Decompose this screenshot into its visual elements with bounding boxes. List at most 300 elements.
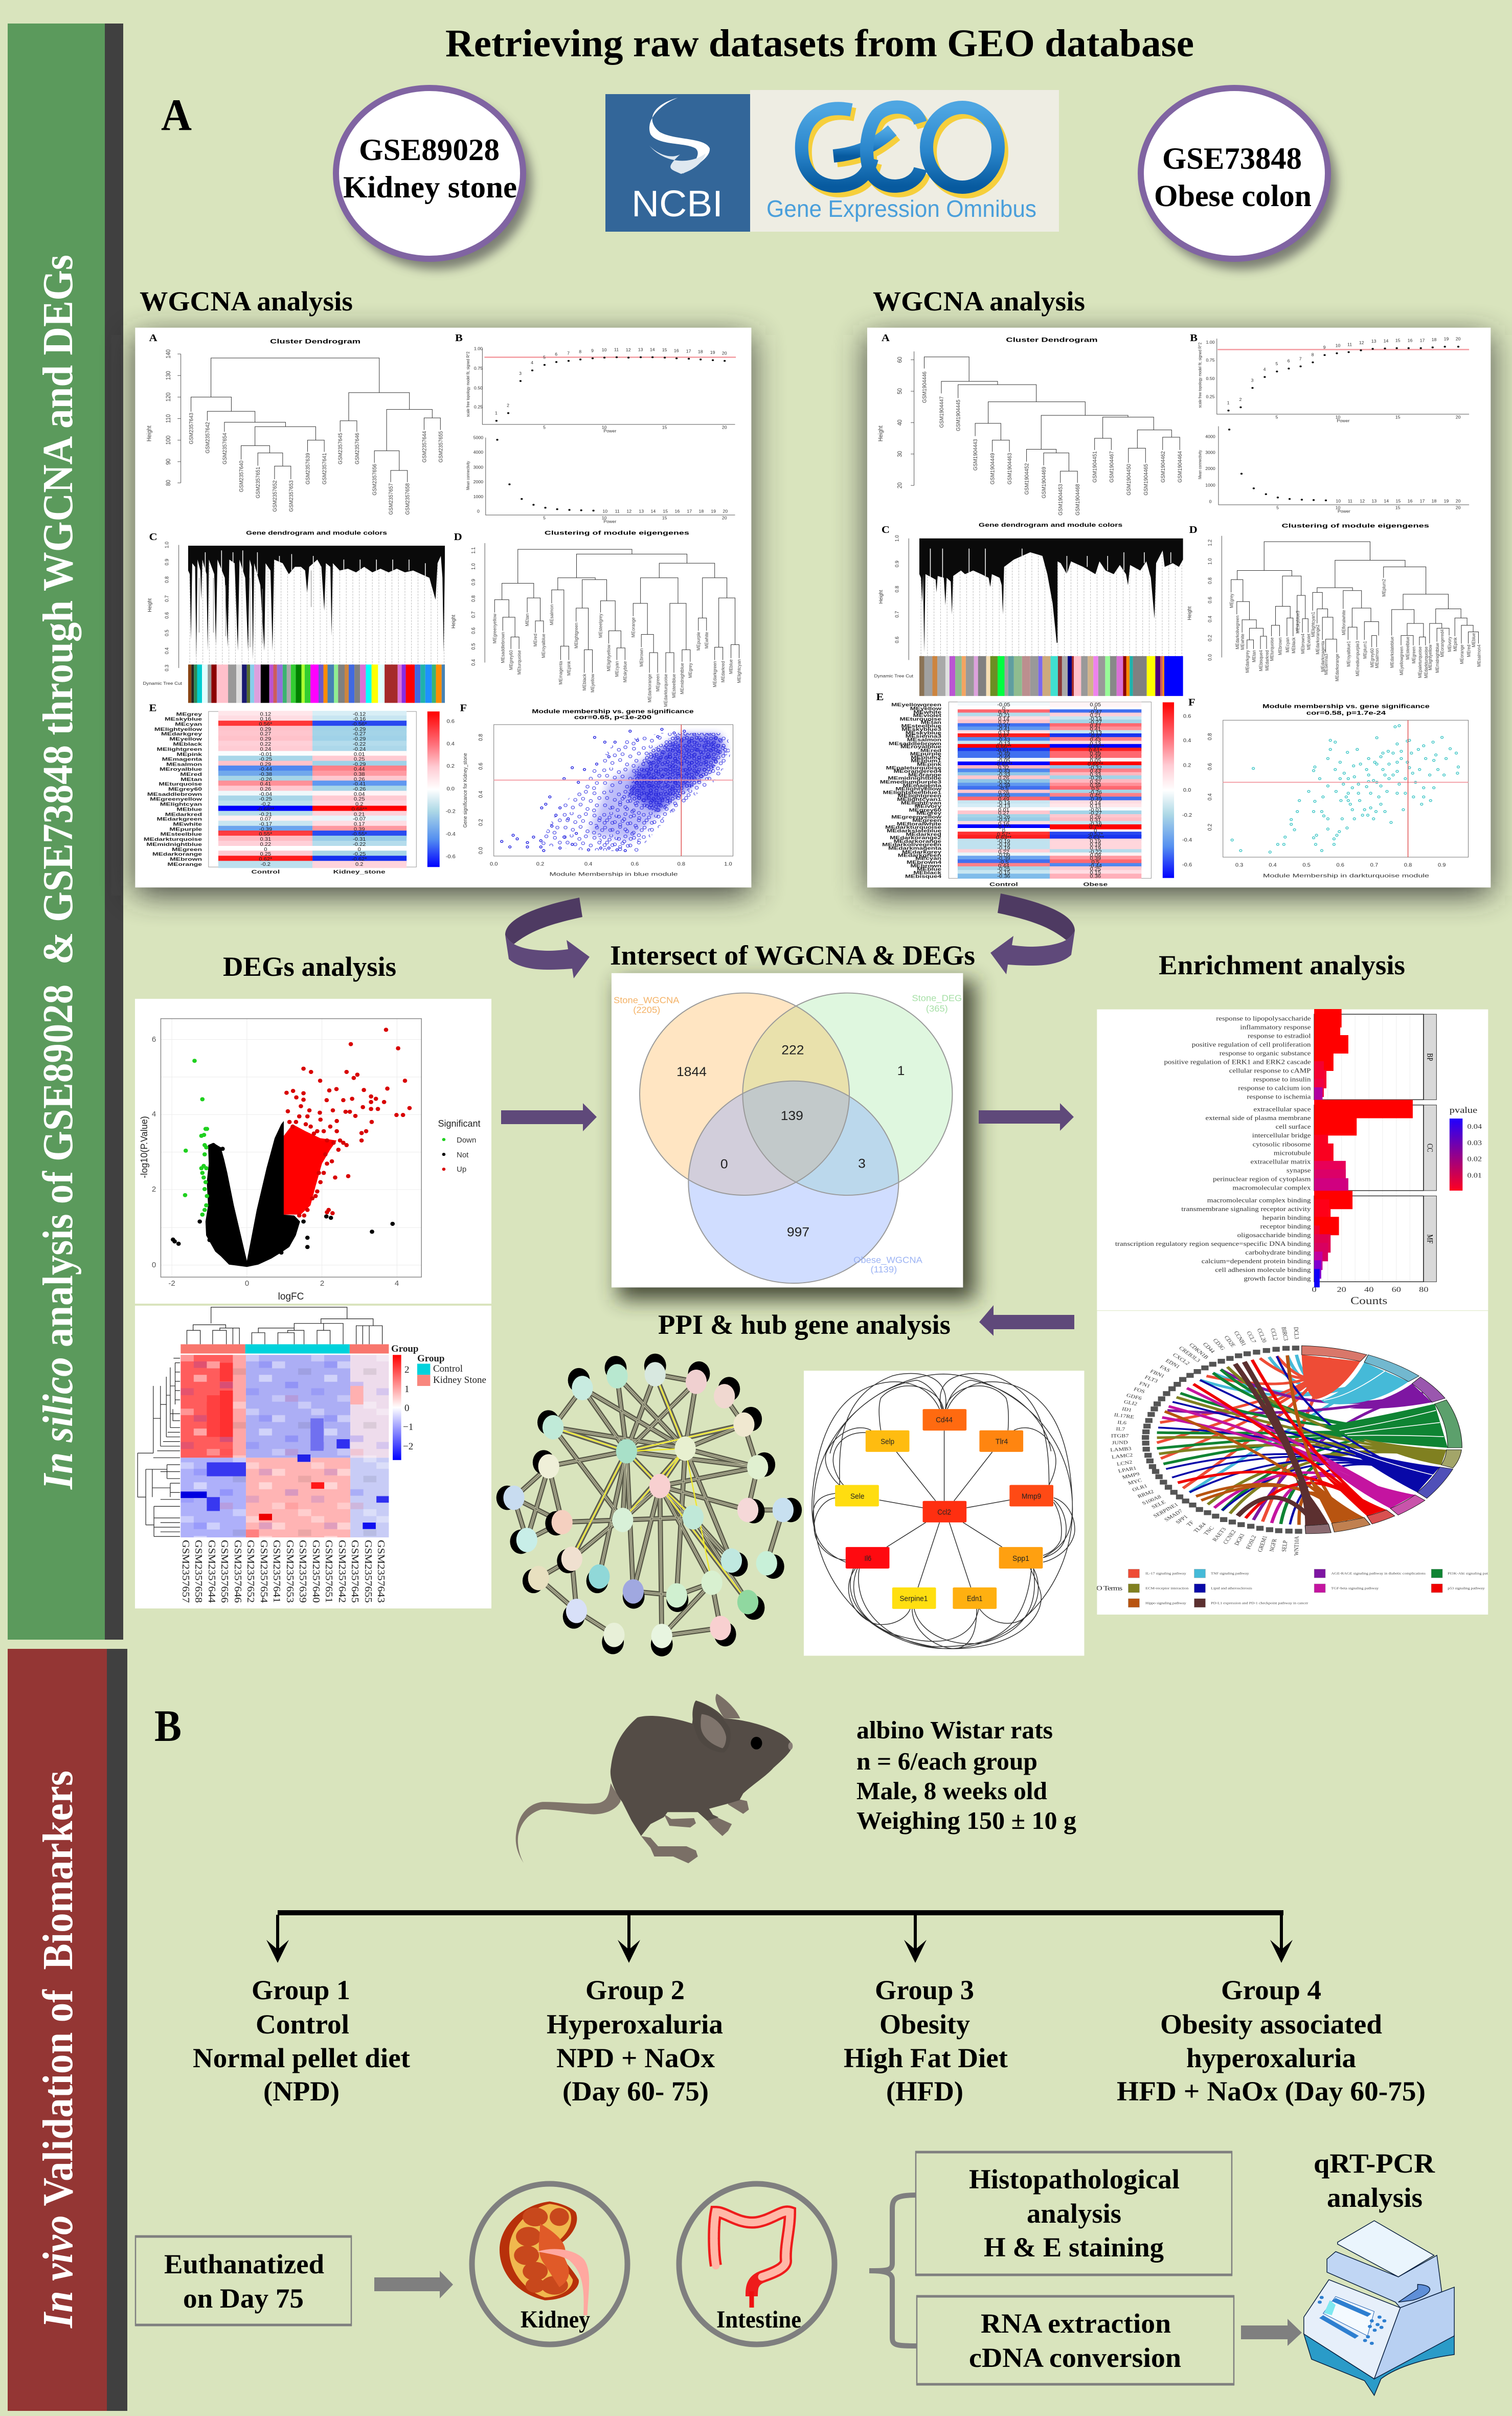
sub-chart E: module trait heatmap: MEgrey60 (168, 786, 202, 792)
panel: volcano plot: 6 (152, 1035, 156, 1044)
heatmap: sample labels: GSM2357644 (206, 1540, 217, 1603)
sub-chart C: gene dendrogram: 0.6 (894, 636, 900, 643)
sub-chart E: module trait heatmap: MEdarkgrey (902, 850, 942, 855)
sub-chart E: module trait heatmap: -0.68** (257, 807, 274, 812)
heatmap: legend (391, 1344, 486, 1452)
chord: gene labels: CD44 (1201, 1341, 1216, 1354)
sub-chart D: module eigengenes: MElightcyan (736, 659, 742, 683)
sub-chart E: module trait heatmap: 0.0 (1183, 788, 1191, 793)
title: Retrieving raw datasets from GEO database (445, 22, 1194, 65)
bar chart: term labels: inflammatory response (1240, 1024, 1311, 1031)
bar chart: term labels (1115, 1015, 1311, 1282)
sub-chart E: module trait heatmap: MEpink (176, 752, 202, 757)
sub-chart E: module trait heatmap: -0.5 (999, 786, 1009, 792)
heading: enrichment analysis: Enrichment analysis (1159, 950, 1405, 980)
sub-chart A: cluster dendrogram: GSM2357646 (354, 433, 360, 464)
sub-chart D: module eigengenes: 0.7 (471, 611, 477, 618)
icon: kidney circle: Kidney (521, 2306, 590, 2333)
sub-chart B: soft threshold: 11 (1347, 342, 1352, 347)
sub-chart A: cluster dendrogram (146, 332, 444, 514)
sub-chart D: module eigengenes: MEcyan (1284, 637, 1290, 653)
sub-chart E: module trait heatmap: -0.41 (997, 726, 1010, 732)
sub-chart B: soft threshold: Power (1338, 509, 1350, 514)
sub-chart A: cluster dendrogram: GSM1904465 (1143, 464, 1149, 496)
sub-chart B: soft threshold: 12 (626, 509, 632, 514)
text: rat details: albino Wistar rats (856, 1716, 1053, 1744)
sub-chart E: module trait heatmap: 0.26 (1090, 814, 1101, 820)
sub-chart B: soft threshold: 15 (1395, 338, 1401, 343)
panel: chord diagram (1091, 1311, 1498, 1615)
sub-chart B: soft threshold: 18 (698, 349, 703, 354)
sub-chart D: module eigengenes: 0.2 (1207, 635, 1213, 641)
sub-chart E: module trait heatmap: 0.32 (1090, 779, 1101, 785)
chord: gene labels: CD2E (1223, 1335, 1237, 1348)
box: RNA extraction: RNA extraction (981, 2308, 1171, 2339)
bar chart: term labels: oligosaccharide binding (1237, 1232, 1311, 1238)
sub-chart B: soft threshold: 13 (1372, 499, 1377, 504)
icon: intestine circle: Intestine (716, 2306, 801, 2333)
sub-chart D: module eigengenes: MEorangered4 (1439, 629, 1445, 657)
sub-chart B: soft threshold: 20 (1456, 499, 1461, 504)
sub-chart E: module trait heatmap: MEblack (173, 742, 202, 747)
sub-chart A: cluster dendrogram: GSM1904467 (1109, 451, 1115, 483)
sub-chart E: module trait heatmap: 0.29 (260, 762, 271, 767)
arrow: curved left to intersect (505, 898, 590, 978)
sub-chart D: module eigengenes: MEdarkmagenta (1320, 641, 1325, 672)
sub-chart F: module membership scatter (460, 702, 733, 877)
sub-chart D: module eigengenes: MEgrey60 (1369, 648, 1375, 667)
sub-chart E: module trait heatmap: 0.39 (354, 826, 365, 832)
sub-chart D: module eigengenes: MEblue (1471, 633, 1476, 647)
sub-chart D: module eigengenes: MEgreen (655, 674, 660, 691)
sub-chart E: module trait heatmap: -0.36 (997, 874, 1010, 880)
box: histopathological analysis: analysis (1027, 2198, 1121, 2229)
sub-chart A: cluster dendrogram: Cluster Dendrogram (270, 338, 360, 345)
sub-chart B: soft threshold: 18 (1432, 499, 1437, 504)
sub-chart D: module eigengenes: MEplum1 (1362, 641, 1367, 659)
sidebar: in silico (8, 24, 123, 1640)
sub-chart A: cluster dendrogram: GSM2357655 (438, 431, 444, 462)
sub-chart D: module eigengenes: MElightcyan1 (1311, 612, 1316, 637)
sub-chart E: module trait heatmap: MEsalmon (166, 762, 202, 767)
sub-chart D: module eigengenes: MEmidnightblue (680, 663, 685, 694)
sub-chart E: module trait heatmap: 0.47 (1090, 723, 1101, 729)
sub-chart E: module trait heatmap: -0.2 (261, 801, 270, 807)
chord: gene labels: TF (1185, 1520, 1195, 1528)
sub-chart E: module trait heatmap: -0.44 (259, 766, 272, 772)
chord: gene slots (1142, 1348, 1302, 1531)
sub-chart A: cluster dendrogram: GSM2357645 (337, 433, 344, 464)
chord: gene labels: FN1 (1138, 1381, 1151, 1389)
icon: rat (516, 1694, 793, 1863)
sub-chart E: module trait heatmap: MEdarkturquoise (144, 836, 202, 842)
sub-chart E: module trait heatmap: -0.01 (1089, 807, 1102, 813)
sub-chart F: module membership scatter: 0.5 (1302, 862, 1311, 868)
sub-chart D: module eigengenes: MEbrown4 (1300, 634, 1305, 654)
heatmap: sample labels (180, 1540, 387, 1603)
panel: volcano plot (135, 999, 491, 1304)
heatmap: sample labels: GSM2357658 (193, 1540, 204, 1603)
sub-chart D: module eigengenes: MEsteelgrey (598, 613, 603, 638)
sub-chart E: module trait heatmap: 0.26 (998, 790, 1009, 795)
sub-chart D: module eigengenes: MEmidnightblue (1435, 643, 1440, 673)
sub-chart E: module trait heatmap: 0.6 (1183, 713, 1191, 719)
chord: gene labels: NGFR (1269, 1538, 1278, 1552)
sub-chart E: module trait heatmap: -0.26 (259, 776, 272, 782)
sub-chart E: module trait heatmap: -0.39 (997, 782, 1010, 789)
panel: DEG heatmap (135, 1306, 491, 1608)
sub-chart E: module trait heatmap: -0.13 (1089, 730, 1102, 736)
bar chart: term labels: intercellular bridge (1252, 1132, 1311, 1139)
sub-chart E: module trait heatmap: 0.5 (1092, 859, 1099, 865)
sub-chart E: module trait heatmap: MEsienna3 (906, 734, 941, 739)
chart: PPI network (497, 1354, 802, 1657)
sub-chart B: soft threshold: 20 (722, 516, 727, 520)
sub-chart E: module trait heatmap: 0.27 (998, 720, 1009, 725)
sub-chart E: module trait heatmap: -0.33 (997, 772, 1010, 778)
dataset circle: GSE89028 kidney stone: GSE89028 (359, 133, 500, 167)
sub-chart E: module trait heatmap: 0.56* (259, 721, 272, 727)
heatmap: legend: Kidney Stone (433, 1375, 486, 1385)
sub-chart E: module trait heatmap: MElightyellow (895, 787, 941, 792)
sub-chart E: module trait heatmap: 0.25 (354, 756, 365, 762)
text: group 3: Group 3 (875, 1975, 974, 2005)
sub-chart D: module eigengenes: MEmediumpurple3 (1355, 641, 1360, 676)
bar chart: term labels: external side of plasma membrane (1205, 1114, 1311, 1122)
chord: gene labels: WNT10A (1293, 1536, 1300, 1556)
chord: gene labels: CREB3L3 (1178, 1346, 1202, 1363)
dataset circle: GSE73848 obese colon (1141, 88, 1337, 270)
sub-chart B: soft threshold: 17 (687, 509, 692, 514)
sub-chart B: soft threshold: 5 (543, 355, 546, 360)
bar chart: term labels: perinuclear region of cytoplasm (1213, 1176, 1311, 1182)
sub-chart E: module trait heatmap: -0.07 (353, 816, 366, 822)
icon: qPCR machine (1304, 2221, 1454, 2396)
sub-chart B: soft threshold: 15 (662, 348, 667, 352)
sub-chart E: module trait heatmap: MEcyan (175, 721, 202, 727)
sub-chart D: module eigengenes: MEsalmon4 (1476, 644, 1482, 667)
sub-chart E: module trait heatmap: -0.49 (997, 754, 1010, 760)
sub-chart D: module eigengenes: MEtan (525, 614, 530, 626)
sub-chart D: module eigengenes: MEsalmon (549, 605, 554, 625)
bar chart: term labels: positive regulation of ERK1 and ERK2 cascade (1164, 1059, 1311, 1065)
sub-chart A: cluster dendrogram: A (882, 332, 890, 344)
sub-chart D: module eigengenes: MEturquoise (516, 650, 522, 675)
sub-chart E: module trait heatmap: 0.29 (260, 726, 271, 732)
hub network: gene boxes: Spp1 (1012, 1554, 1029, 1562)
sub-chart E: module trait heatmap: Obese (1083, 882, 1108, 887)
sub-chart F: module membership scatter: 0.8 (678, 861, 685, 867)
dataset circle: GSE89028 kidney stone (336, 88, 532, 270)
sub-chart E: module trait heatmap: 0.25 (260, 852, 271, 857)
sub-chart E: module trait heatmap: -0.57* (1088, 832, 1103, 837)
sub-chart B: soft threshold: 15 (1395, 505, 1401, 510)
chord: gene labels: IL6 (1117, 1420, 1127, 1426)
text: group 1: (NPD) (263, 2076, 340, 2107)
chord: legend: TNF signaling pathway (1211, 1571, 1249, 1575)
bar chart: p-value legend: 0.01 (1467, 1172, 1482, 1179)
sub-chart B: soft threshold (455, 332, 736, 524)
sub-chart E: module trait heatmap: -0.19 (997, 845, 1010, 852)
text: rat details: Weighing 150 ± 10 g (856, 1806, 1077, 1835)
sub-chart E: module trait heatmap: 0.66** (996, 744, 1011, 750)
sub-chart B: soft threshold: 13 (639, 509, 644, 514)
chord: gene labels: SERPINE1 (1152, 1502, 1180, 1519)
sub-chart D: module eigengenes: MEgreen (1411, 646, 1416, 663)
sub-chart B: soft threshold: 19 (1444, 337, 1449, 342)
sub-chart C: gene dendrogram: 0.6 (164, 612, 170, 619)
hub network: edges (812, 1374, 1075, 1649)
sub-chart B: soft threshold: 2000 (473, 479, 484, 484)
sub-chart E: module trait heatmap: 0.15 (1090, 870, 1101, 876)
sub-chart A: cluster dendrogram: GSM2357644 (421, 431, 428, 462)
sub-chart D: module eigengenes: MEdarkorange2 (1315, 624, 1320, 655)
chord: gene labels (1110, 1327, 1300, 1556)
sub-chart D: module eigengenes: MEdarkorange (647, 674, 652, 703)
sub-chart E: module trait heatmap: -0.5 (999, 859, 1009, 865)
sub-chart B: soft threshold: 18 (699, 509, 704, 514)
hub network: gene boxes: Serpine1 (899, 1595, 928, 1603)
sub-chart D: module eigengenes: 1.1 (471, 547, 477, 554)
sub-chart D: module eigengenes: MEdarkslateblue (1389, 637, 1395, 668)
sub-chart C: gene dendrogram: 0.7 (894, 611, 900, 618)
sub-chart E: module trait heatmap: -0.6 (1182, 862, 1192, 868)
heatmap: column dendrogram (187, 1307, 382, 1344)
bar chart: term labels: macromolecular complex binding (1207, 1197, 1311, 1203)
bar chart: term labels: carbohydrate binding (1245, 1249, 1311, 1256)
sub-chart E: module trait heatmap: -0.16 (353, 716, 366, 722)
sub-chart E: module trait heatmap: 0.21 (1090, 712, 1101, 719)
sub-chart D: module eigengenes: 1.0 (1207, 558, 1213, 565)
venn: set labels: Obese_WGCNA (853, 1255, 922, 1265)
sub-chart E: module trait heatmap: -0.24 (353, 747, 366, 752)
sub-chart C: gene dendrogram (874, 521, 1183, 679)
sub-chart B: soft threshold: B (455, 332, 463, 344)
sub-chart A: cluster dendrogram: 110 (165, 414, 172, 423)
sub-chart E: module trait heatmap: MElightgreen (157, 747, 202, 752)
sub-chart E: module trait heatmap: MEplum1 (911, 758, 942, 764)
sub-chart D: module eigengenes: MEbisque4 (1258, 650, 1263, 671)
sub-chart E: module trait heatmap: 0.04 (354, 792, 365, 797)
sub-chart F: module membership scatter: 0.8 (1207, 733, 1213, 740)
sub-chart A: cluster dendrogram: GSM2357656 (372, 464, 378, 496)
sub-chart A: cluster dendrogram: GSM1904450 (1125, 464, 1132, 496)
sub-chart E: module trait heatmap: 0.0 (446, 786, 455, 792)
panel: WGCNA kidney stone (135, 328, 751, 896)
sub-chart E: module trait heatmap: -0.22 (353, 742, 366, 747)
text: rat details: Male, 8 weeks old (856, 1777, 1047, 1805)
sub-chart A: cluster dendrogram: GSM1904452 (1024, 463, 1030, 495)
heatmap: sample labels: GSM2357646 (232, 1540, 243, 1603)
sub-chart E: module trait heatmap: MEyellow (910, 706, 941, 711)
sub-chart E: module trait heatmap: 0.2 (355, 862, 364, 867)
panel: WGCNA obese colon (867, 328, 1491, 896)
sub-chart B: soft threshold: B (1190, 332, 1198, 344)
hub network: gene boxes: Ccl2 (937, 1508, 951, 1516)
sub-chart E: module trait heatmap: -0.27 (353, 731, 366, 737)
sub-chart E: module trait heatmap: 0.05 (1090, 702, 1101, 708)
sub-chart E: module trait heatmap: -0.31 (997, 817, 1010, 823)
sub-chart E: module trait heatmap: -0.26 (1089, 775, 1102, 781)
sub-chart D: module eigengenes: MEsienna3 (1323, 654, 1329, 675)
sub-chart E: module trait heatmap: 0.32 (998, 765, 1009, 771)
sub-chart E: module trait heatmap (876, 691, 1192, 887)
sub-chart E: module trait heatmap: 0 (1002, 828, 1005, 834)
sub-chart D: module eigengenes: MEdarkred (1265, 650, 1270, 670)
sub-chart B: soft threshold: 2 (507, 403, 509, 408)
sub-chart B: soft threshold: 4 (531, 361, 533, 365)
sub-chart F: module membership scatter: Gene significance for Kidney_stone (463, 753, 468, 827)
sub-chart B: soft threshold: 7 (567, 351, 570, 355)
sub-chart B: soft threshold: 6 (555, 352, 557, 357)
sub-chart C: gene dendrogram: C (149, 531, 157, 543)
sub-chart D: module eigengenes: MEred (533, 634, 538, 646)
sub-chart E: module trait heatmap: MEpurple (910, 752, 942, 756)
chord: gene labels: MMP9 (1121, 1471, 1141, 1480)
sub-chart E: module trait heatmap: -0.47 (1089, 709, 1102, 715)
bar chart: term labels: receptor binding (1260, 1223, 1311, 1229)
sub-chart E: module trait heatmap: 0.7** (1089, 824, 1101, 830)
sub-chart E: module trait heatmap: 0.49 (1090, 754, 1101, 760)
sub-chart E: module trait heatmap: 0.38 (354, 771, 365, 777)
sub-chart B: soft threshold: 10 (602, 425, 607, 430)
sub-chart E: module trait heatmap: MEroyalblue (160, 766, 202, 772)
chord: gene labels: ITGB7 (1111, 1433, 1129, 1439)
sub-chart B: soft threshold: 0.50 (1206, 376, 1215, 381)
sub-chart D: module eigengenes: MEskyblue (622, 661, 628, 682)
sub-chart D: module eigengenes: 0.5 (471, 643, 477, 650)
sub-chart B: soft threshold: 1000 (1205, 483, 1215, 487)
heatmap: sample labels: GSM2357652 (245, 1540, 256, 1603)
bar chart: term labels: response to organic substance (1220, 1050, 1311, 1057)
sub-chart A: cluster dendrogram: GSM2357640 (238, 461, 245, 492)
sub-chart E: module trait heatmap: -0.26 (997, 814, 1010, 820)
sub-chart E: module trait heatmap: 0.68** (352, 807, 367, 812)
sub-chart D: module eigengenes: MEbrown (1277, 637, 1283, 655)
chord: gene labels: FOS (1133, 1386, 1146, 1395)
sub-chart E: module trait heatmap: 0.22 (998, 849, 1009, 855)
sub-chart E: module trait heatmap: -0.4 (446, 831, 456, 837)
panel: hub gene network (804, 1371, 1084, 1656)
chord: gene labels: CCL20 (1255, 1328, 1268, 1344)
sub-chart E: module trait heatmap: MEgreenyellow (150, 796, 202, 802)
sub-chart E: module trait heatmap: -0.2 (446, 809, 456, 814)
box: euthanized (135, 2235, 352, 2326)
sub-chart F: module membership scatter: 0.3 (1235, 862, 1243, 868)
sub-chart F: module membership scatter: 0.6 (1207, 763, 1213, 770)
chord: gene labels: TNC (1203, 1526, 1215, 1536)
venn: circles (640, 993, 952, 1283)
sub-chart D: module eigengenes: 0.9 (471, 579, 477, 586)
chord: gene labels: CCNB1 (1232, 1330, 1247, 1347)
bar chart: term labels: microtubule (1274, 1150, 1311, 1156)
hub network: gene boxes: Edn1 (967, 1595, 983, 1603)
venn: counts: 997 (787, 1225, 809, 1239)
sub-chart E: module trait heatmap: -0.21 (997, 712, 1010, 719)
panel: volcano plot: -log10(P.Value) (139, 1116, 149, 1178)
chord: gene labels: SELE (1150, 1500, 1167, 1510)
sub-chart B: soft threshold: 4000 (1205, 434, 1215, 439)
sub-chart F: module membership scatter: 0.2 (1207, 823, 1213, 831)
heatmap: legend: Control (433, 1363, 463, 1374)
text: group 3: High Fat Diet (844, 2043, 1008, 2073)
sub-chart E: module trait heatmap: 0.45 (1090, 793, 1101, 799)
heatmap: colour scale (393, 1355, 401, 1460)
sub-chart E: module trait heatmap: MEgrey60 (909, 808, 941, 813)
sub-chart E: module trait heatmap: 0.31 (260, 836, 271, 842)
panel: volcano plot: logFC (278, 1291, 304, 1302)
sub-chart E: module trait heatmap: MEpurple (169, 826, 202, 832)
sub-chart C: gene dendrogram: Gene dendrogram and module colors (246, 529, 387, 536)
sub-chart E: module trait heatmap: -0.05 (997, 702, 1010, 708)
chord: gene labels: DGKI (1233, 1533, 1246, 1546)
sub-chart E: module trait heatmap: 0.44 (354, 766, 365, 772)
sub-chart B: soft threshold: 11 (1348, 499, 1352, 504)
chord: gene labels: TLR4 (1192, 1522, 1208, 1534)
sub-chart D: module eigengenes: 1.2 (1207, 540, 1213, 546)
panel letter B: B (154, 1702, 182, 1751)
sub-chart F: module membership scatter: 0.6 (631, 861, 639, 867)
sub-chart E: module trait heatmap (144, 702, 456, 875)
text: group 1: Normal pellet diet (193, 2043, 410, 2073)
bar chart: axis: 40 (1364, 1285, 1373, 1294)
chord: gene labels: FLT3 (1143, 1375, 1159, 1384)
sub-chart B: soft threshold: 14 (1384, 339, 1389, 343)
sub-chart D: module eigengenes: MEivory (1447, 636, 1452, 652)
venn: set labels: (365) (926, 1003, 948, 1014)
panel: venn diagram (612, 973, 975, 1300)
sub-chart E: module trait heatmap: -0.05 (997, 758, 1010, 764)
chord: gene labels: GDF6 (1125, 1393, 1143, 1401)
sub-chart E: module trait heatmap: 0.2 (1183, 763, 1191, 768)
chord: gene labels: CD3G (1211, 1338, 1226, 1351)
sub-chart F: module membership scatter: 0.4 (584, 861, 592, 867)
panel: volcano plot: 4 (152, 1110, 156, 1118)
heading: qRT-PCR: analysis (1327, 2182, 1423, 2213)
sub-chart C: gene dendrogram: Height (878, 590, 884, 603)
heatmap: sample labels: GSM2357656 (219, 1540, 230, 1603)
sub-chart E: module trait heatmap: 0.4 (446, 741, 455, 747)
panel: volcano plot: 2 (320, 1279, 324, 1288)
sub-chart D: module eigengenes: MElightgreen (573, 623, 579, 648)
sub-chart E: module trait heatmap: 0.41 (1090, 726, 1101, 732)
sub-chart E: module trait heatmap: 0.14 (998, 716, 1009, 722)
venn: counts: 1 (897, 1064, 905, 1078)
sub-chart E: module trait heatmap: 0.01 (998, 807, 1009, 813)
sub-chart D: module eigengenes: MEroyalblue1 (1346, 641, 1351, 666)
chord: legend (1091, 1569, 1498, 1607)
sub-chart A: cluster dendrogram: GSM1904453 (1057, 484, 1064, 516)
sub-chart D: module eigengenes: 0.4 (1207, 616, 1213, 622)
sub-chart B: soft threshold: 16 (1408, 338, 1413, 343)
sub-chart E: module trait heatmap: MEorange (908, 773, 942, 778)
sub-chart B: soft threshold: 20 (722, 425, 727, 430)
sub-chart D: module eigengenes: MEbrown (639, 648, 644, 667)
sub-chart B: soft threshold: Power (1337, 418, 1349, 423)
chord: gene labels: LCN2 (1116, 1460, 1133, 1467)
sub-chart B: soft threshold: 0.25 (474, 405, 483, 409)
bar chart: term labels: positive regulation of cell proliferation (1192, 1041, 1311, 1048)
sub-chart E: module trait heatmap: MEdarkturquoise (885, 825, 942, 830)
sub-chart A: cluster dendrogram: 30 (897, 451, 904, 457)
heatmap: sample labels: GSM2357640 (310, 1540, 322, 1603)
sub-chart D: module eigengenes: MEplum2 (1381, 579, 1387, 597)
sub-chart E: module trait heatmap: -0.09 (997, 853, 1010, 858)
sub-chart D: module eigengenes: MEdarkorange (1335, 654, 1340, 681)
sub-chart E: module trait heatmap: MElightcyan1 (897, 797, 942, 802)
sub-chart D: module eigengenes: MEroyalblue (541, 634, 546, 658)
box: RNA extraction: cDNA conversion (969, 2342, 1181, 2373)
